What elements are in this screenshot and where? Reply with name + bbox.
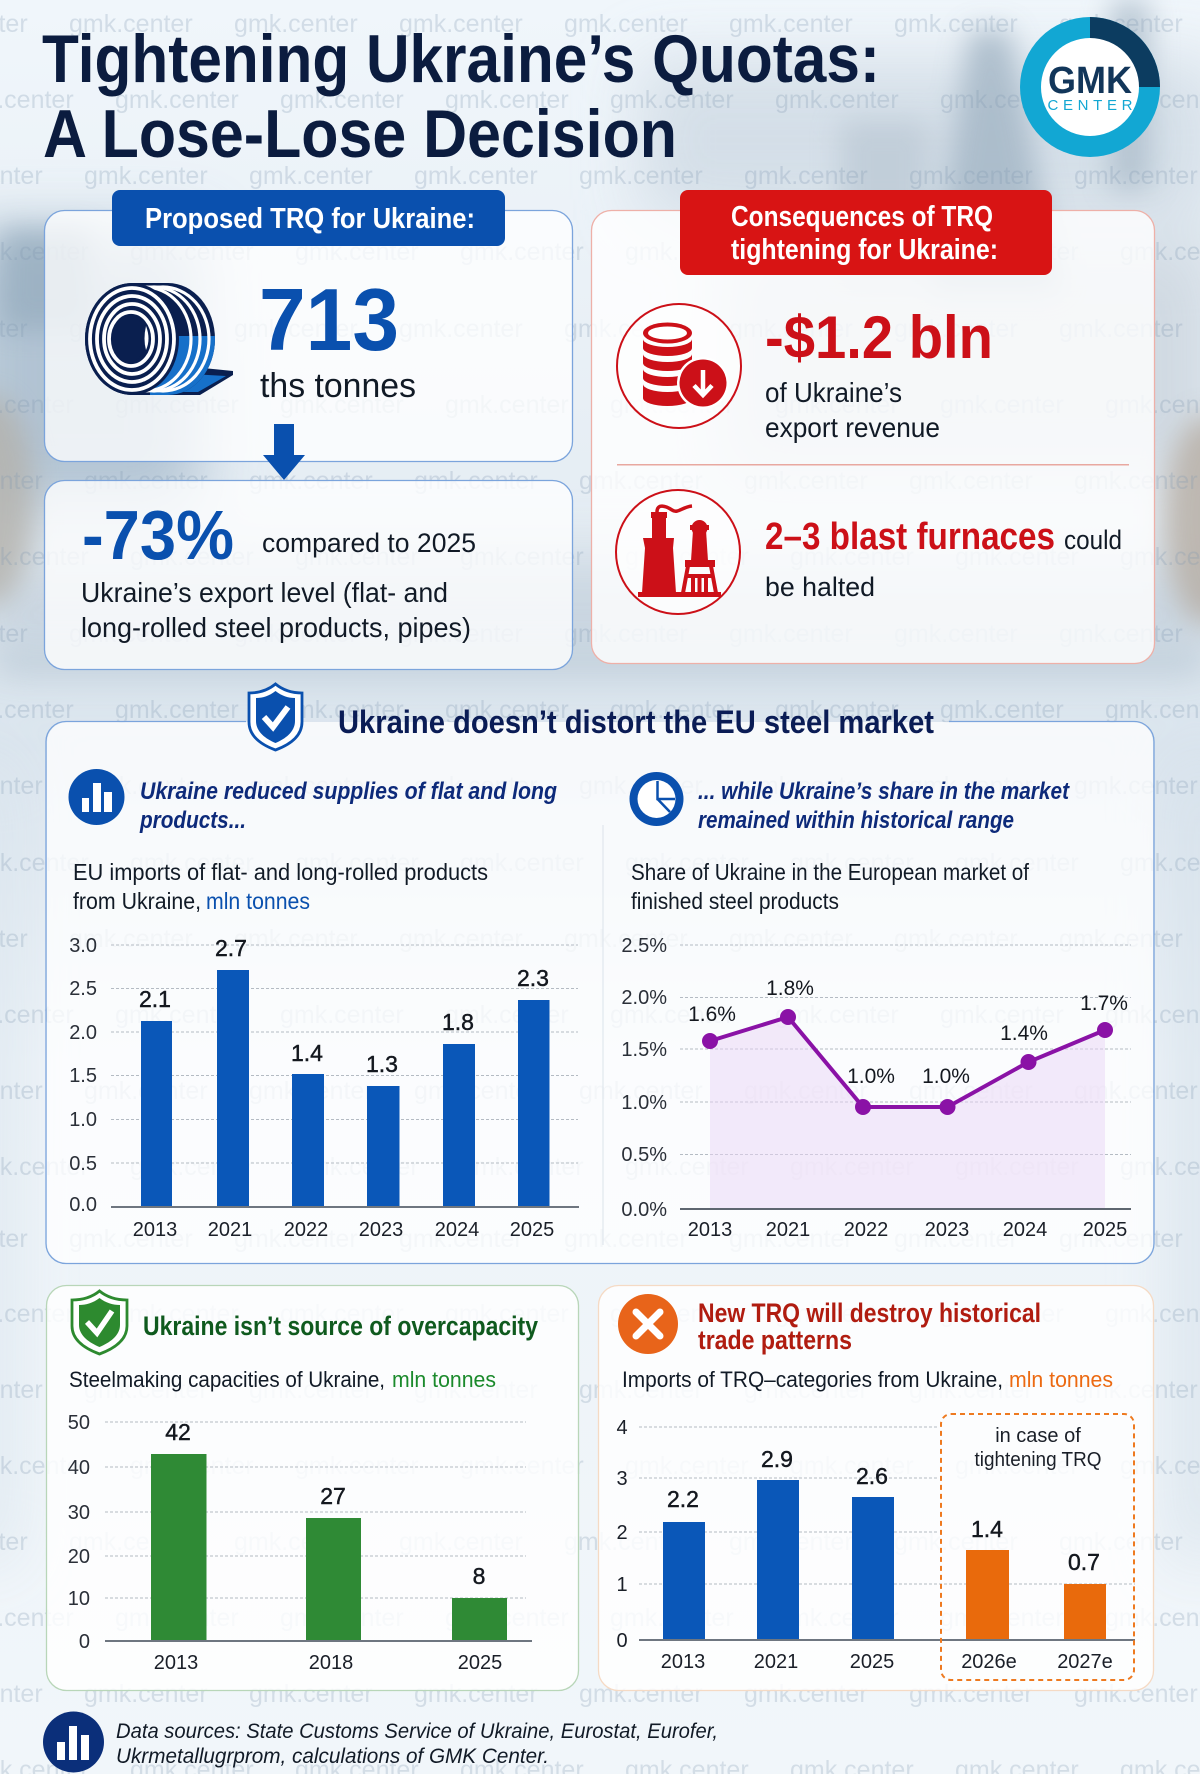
watermark pattern: gmk.center [115, 1300, 239, 1328]
line chart: Ukraine share: 2022 [844, 1219, 888, 1241]
title: Tightening Ukraine’s Quotas: [42, 21, 880, 97]
chart subtitle: TRQ imports: mln tonnes [1009, 1367, 1113, 1392]
chart subtitle: EU imports [73, 859, 488, 914]
line chart: Ukraine share: 1.4% [1000, 1022, 1048, 1045]
bar chart: EU imports: 0.0 [69, 1194, 97, 1216]
bar chart: TRQ imports: 1 [616, 1574, 628, 1596]
watermark pattern: gmk.center [130, 1153, 254, 1181]
watermark pattern: gmk.center [84, 162, 208, 190]
watermark pattern: gmk.center [280, 1300, 404, 1328]
watermark pattern: gmk.center [414, 162, 538, 190]
watermark pattern: gmk.center [280, 391, 404, 419]
watermark pattern: gmk.center [909, 467, 1033, 495]
line chart: Ukraine share: 1.7% [1080, 992, 1128, 1015]
stat: -73%: -73% [82, 496, 234, 574]
watermark pattern: gmk.center [790, 849, 914, 877]
heading: overcapacity: Ukraine isn’t source of overcapacity [143, 1311, 538, 1341]
bar chart: EU imports: 2.7 [215, 935, 247, 961]
bar chart: EU imports: 0.5 [69, 1153, 97, 1175]
subheading: reduced supplies: Ukraine reduced supplies of flat and long [140, 778, 557, 805]
watermark pattern: gmk.center [744, 162, 868, 190]
watermark pattern: gmk.center [579, 1680, 703, 1708]
line chart: Ukraine share: 0.0% [621, 1199, 667, 1221]
watermark pattern: gmk.center [460, 238, 584, 266]
title: A Lose-Lose Decision [43, 96, 677, 172]
logo: GMK Center [1020, 17, 1160, 157]
watermark pattern: gmk.center [249, 1680, 373, 1708]
watermark pattern: gmk.center [414, 467, 538, 495]
watermark pattern: gmk.center [909, 1077, 1033, 1105]
text: export level description [81, 577, 471, 643]
watermark pattern: gmk.center [249, 1376, 373, 1404]
icon: blast furnace [616, 490, 740, 614]
watermark pattern: gmk.center [894, 1528, 1018, 1556]
watermark pattern: gmk.center [399, 10, 523, 38]
bar chart: EU imports: 1.5 [69, 1065, 97, 1087]
bar chart: TRQ imports: 2013 [661, 1651, 705, 1673]
bar chart: steelmaking capacities: 20 [68, 1546, 90, 1568]
watermark pattern: gmk.center [280, 1604, 404, 1632]
watermark pattern: gmk.center [130, 238, 254, 266]
watermark pattern: gmk.center [564, 10, 688, 38]
callout: in case of tightening TRQ: in case of [995, 1425, 1081, 1447]
watermark pattern: gmk.center [295, 1452, 419, 1480]
watermark pattern: gmk.center [909, 1376, 1033, 1404]
heading: trade patterns: New TRQ will destroy historical [698, 1298, 1041, 1328]
bar chart: EU imports: 2013 [133, 1219, 177, 1241]
watermark pattern: gmk.center [445, 1300, 569, 1328]
line chart: Ukraine share: 2.5% [621, 935, 667, 957]
watermark pattern: gmk.center [295, 849, 419, 877]
watermark pattern: gmk.center [399, 925, 523, 953]
logo: GMK Center: CENTER [1048, 97, 1133, 114]
callout: in case of tightening TRQ [941, 1414, 1134, 1680]
panel: consequences [592, 210, 1154, 664]
line chart: Ukraine share: 2021 [766, 1219, 810, 1241]
watermark pattern: gmk.center [69, 620, 193, 648]
bar chart: TRQ imports: 3 [616, 1468, 628, 1490]
title [42, 21, 880, 172]
text: export level description: Ukraine’s export level (flat- and [81, 577, 448, 608]
panel border: EU steel market [46, 722, 1154, 1264]
icon: shield blue [249, 684, 302, 750]
watermark pattern: gmk.center [564, 620, 688, 648]
line chart: Ukraine share: 1.8% [766, 977, 814, 1000]
watermark pattern: gmk.center [775, 86, 899, 114]
bar chart: EU imports: 2023 [359, 1219, 403, 1241]
icon: steel coil [85, 283, 233, 398]
stat: -$1.2 bln: -$1.2 bln [765, 304, 993, 371]
watermark pattern: gmk.center [69, 315, 193, 343]
watermark pattern: gmk.center [234, 925, 358, 953]
watermark pattern: gmk.center [790, 1452, 914, 1480]
bar chart: TRQ imports: 4 [616, 1417, 628, 1439]
watermark pattern: gmk.center [249, 1077, 373, 1105]
header: proposed TRQ: Proposed TRQ for Ukraine: [145, 203, 475, 235]
bar chart: EU imports: 1.0 [69, 1109, 97, 1131]
bar chart: EU imports [69, 935, 579, 1241]
text: data sources: Ukrmetallugrprom, calculations of GMK Center. [116, 1745, 549, 1768]
bar chart: EU imports: 1.4 [291, 1040, 323, 1066]
line chart: Ukraine share: 1.0% [621, 1092, 667, 1114]
watermark pattern: gmk.center [445, 391, 569, 419]
watermark pattern: gmk.center [775, 696, 899, 724]
watermark pattern: gmk.center [280, 696, 404, 724]
watermark pattern: gmk.center [1074, 1376, 1198, 1404]
line chart: Ukraine share: 1.0% [922, 1065, 970, 1088]
watermark pattern: gmk.center [414, 1680, 538, 1708]
panel: export level comparison [44, 480, 572, 670]
bar chart: TRQ imports: 2026e [961, 1651, 1017, 1673]
watermark pattern: gmk.center [790, 543, 914, 571]
watermark pattern: gmk.center [414, 1376, 538, 1404]
watermark pattern: gmk.center [955, 543, 1079, 571]
watermark pattern: gmk.center [460, 543, 584, 571]
watermark pattern: gmk.center [625, 238, 749, 266]
watermark pattern: gmk.center [460, 1153, 584, 1181]
line chart: Ukraine share: 0.5% [621, 1144, 667, 1166]
watermark pattern: gmk.center [295, 238, 419, 266]
watermark pattern: gmk.center [790, 1153, 914, 1181]
bar chart: TRQ imports [616, 1417, 1135, 1673]
watermark pattern: gmk.center [955, 1452, 1079, 1480]
watermark pattern: gmk.center [414, 772, 538, 800]
watermark pattern: gmk.center [130, 849, 254, 877]
subheading: share within range: ... while Ukraine’s share in the market [698, 778, 1070, 805]
bar chart: TRQ imports: 2.9 [761, 1446, 793, 1472]
bar chart: EU imports: 1.8 [442, 1009, 474, 1035]
watermark pattern: gmk.center [399, 1528, 523, 1556]
bar chart: EU imports: 1.3 [366, 1051, 398, 1077]
watermark pattern: gmk.center [234, 1225, 358, 1253]
watermark pattern: gmk.center [610, 1604, 734, 1632]
watermark pattern: gmk.center [115, 391, 239, 419]
icon: data sources [43, 1712, 104, 1772]
text: data sources [116, 1720, 718, 1768]
panel fill: EU steel market [47, 722, 1153, 1263]
bar chart: TRQ imports: 2025 [850, 1651, 894, 1673]
watermark pattern: gmk.center [445, 1001, 569, 1029]
watermark pattern: gmk.center [69, 1225, 193, 1253]
watermark pattern: gmk.center [1074, 162, 1198, 190]
bar chart: TRQ imports: 2.6 [856, 1463, 888, 1489]
watermark pattern: gmk.center [579, 1077, 703, 1105]
header: consequences [680, 190, 1052, 275]
watermark pattern: gmk.center [579, 1376, 703, 1404]
line chart: Ukraine share: 2013 [688, 1219, 732, 1241]
watermark pattern: gmk.center [564, 925, 688, 953]
text: blast furnaces: 2–3 blast furnaces [765, 516, 1055, 558]
chart subtitle: EU imports: EU imports of flat- and long-rolled products [73, 859, 488, 885]
stat: 713: 713 [259, 270, 399, 369]
watermark pattern: gmk.center [579, 772, 703, 800]
watermark pattern: gmk.center [69, 1528, 193, 1556]
watermark pattern: gmk.center [295, 543, 419, 571]
watermark pattern: gmk.center [625, 543, 749, 571]
watermark pattern: gmk.center [69, 10, 193, 38]
header: consequences: Consequences of TRQ [731, 201, 993, 233]
subheading: reduced supplies: products... [139, 807, 246, 834]
icon: coins with down arrow [617, 304, 741, 428]
header: consequences: tightening for Ukraine: [731, 234, 998, 266]
heading: trade patterns: trade patterns [698, 1325, 852, 1355]
chart subtitle: EU imports: mln tonnes [206, 888, 310, 914]
watermark pattern: gmk.center [399, 315, 523, 343]
bar chart: EU imports: 2022 [284, 1219, 328, 1241]
watermark pattern: gmk.center [295, 1153, 419, 1181]
line chart: Ukraine share: 2023 [925, 1219, 969, 1241]
chart subtitle: share: finished steel products [631, 888, 839, 914]
watermark pattern: gmk.center [729, 1528, 853, 1556]
watermark pattern: gmk.center [130, 543, 254, 571]
watermark pattern: gmk.center [775, 1001, 899, 1029]
bar chart: EU imports: 3.0 [69, 935, 97, 957]
watermark pattern: gmk.center [894, 315, 1018, 343]
watermark pattern: gmk.center [940, 1300, 1064, 1328]
bar chart: EU imports: 2.1 [139, 986, 171, 1012]
watermark pattern: gmk.center [1074, 467, 1198, 495]
watermark pattern: gmk.center [894, 620, 1018, 648]
watermark pattern: gmk.center [940, 1001, 1064, 1029]
watermark pattern: gmk.center [909, 1680, 1033, 1708]
watermark pattern: gmk.center [744, 467, 868, 495]
watermark pattern: gmk.center [445, 696, 569, 724]
watermark pattern: gmk.center [1059, 10, 1183, 38]
line chart: Ukraine share: 2.0% [621, 987, 667, 1009]
watermark pattern: gmk.center [115, 1001, 239, 1029]
bar chart: steelmaking capacities: 40 [68, 1457, 90, 1479]
watermark pattern: gmk.center [610, 696, 734, 724]
bar chart: steelmaking capacities: 42 [165, 1419, 191, 1445]
watermark pattern: gmk.center [940, 86, 1064, 114]
watermark pattern: gmk.center [729, 10, 853, 38]
text: export revenue [765, 377, 940, 443]
watermark pattern: gmk.center [1074, 1680, 1198, 1708]
heading: trade patterns [698, 1298, 1041, 1355]
chart subtitle: EU imports: from Ukraine, [73, 888, 201, 914]
watermark pattern: gmk.center [909, 772, 1033, 800]
watermark pattern: gmk.center [460, 1452, 584, 1480]
line chart: Ukraine share: 1.6% [688, 1003, 736, 1026]
watermark pattern: gmk.center [249, 162, 373, 190]
watermark pattern: gmk.center [775, 1604, 899, 1632]
watermark pattern: gmk.center [940, 391, 1064, 419]
watermark pattern: gmk.center [744, 772, 868, 800]
text: export revenue: of Ukraine’s [765, 377, 902, 408]
watermark pattern: gmk.center [894, 1225, 1018, 1253]
chart subtitle: TRQ imports: Imports of TRQ–categories from Ukraine, [622, 1367, 1003, 1392]
watermark pattern: gmk.center [729, 925, 853, 953]
watermark pattern: gmk.center [610, 1001, 734, 1029]
logo: GMK Center: GMK [1048, 60, 1133, 102]
bar chart: EU imports: 2.3 [517, 965, 549, 991]
bar chart: steelmaking capacities: 2013 [154, 1652, 198, 1674]
icon: pie chart circle [630, 772, 684, 826]
watermark pattern: gmk.center [115, 86, 239, 114]
watermark pattern: gmk.center [744, 1077, 868, 1105]
watermark pattern: gmk.center [579, 467, 703, 495]
watermark pattern: gmk.center [234, 620, 358, 648]
panel: proposed TRQ [44, 210, 572, 462]
arrow: down [263, 424, 305, 480]
watermark pattern: gmk.center [130, 1452, 254, 1480]
bar chart: TRQ imports: 2.2 [667, 1486, 699, 1512]
watermark pattern: gmk.center [1074, 1077, 1198, 1105]
subheading: reduced supplies [139, 778, 557, 834]
subheading: share within range: remained within historical range [698, 807, 1014, 834]
watermark pattern: gmk.center [115, 1604, 239, 1632]
watermark pattern: gmk.center [460, 849, 584, 877]
watermark pattern: gmk.center [610, 86, 734, 114]
bar chart: TRQ imports: 2021 [754, 1651, 798, 1673]
bar chart: steelmaking capacities: 2025 [458, 1652, 502, 1674]
chart subtitle: share: Share of Ukraine in the European market of [631, 859, 1030, 885]
watermark pattern: gmk.center [909, 162, 1033, 190]
watermark pattern: gmk.center [84, 772, 208, 800]
watermark pattern: gmk.center [579, 162, 703, 190]
icon: green shield [72, 1291, 127, 1354]
bar chart: TRQ imports: 0 [616, 1630, 628, 1652]
watermark pattern: gmk.center [775, 1300, 899, 1328]
callout: in case of tightening TRQ: tightening TRQ [974, 1449, 1102, 1471]
watermark pattern: gmk.center [249, 772, 373, 800]
watermark pattern: gmk.center [775, 391, 899, 419]
bar chart: EU imports: 2.5 [69, 978, 97, 1000]
bar chart: TRQ imports: 2027e [1057, 1651, 1113, 1673]
watermark pattern: gmk.center [894, 10, 1018, 38]
watermark pattern: gmk.center [399, 1225, 523, 1253]
text: blast furnaces [765, 516, 1122, 602]
text: data sources: Data sources: State Customs Service of Ukraine, Eurostat, Eurofer, [116, 1720, 718, 1743]
bar chart: TRQ imports: 1.4 [971, 1516, 1003, 1542]
watermark pattern: gmk.center [280, 1001, 404, 1029]
bar chart: steelmaking capacities: 8 [473, 1563, 485, 1589]
panel: overcapacity [46, 1286, 578, 1690]
watermark pattern: gmk.center [729, 315, 853, 343]
watermark pattern: gmk.center [955, 849, 1079, 877]
watermark pattern: gmk.center [84, 1680, 208, 1708]
watermark pattern: gmk.center [940, 696, 1064, 724]
watermark pattern: gmk.center [1059, 620, 1183, 648]
bar chart: steelmaking capacities: 2018 [309, 1652, 353, 1674]
text: ths tonnes: ths tonnes [260, 367, 416, 405]
bar chart: steelmaking capacities: 0 [79, 1631, 90, 1653]
watermark pattern: gmk.center [955, 1153, 1079, 1181]
text: export level description: long-rolled steel products, pipes) [81, 612, 471, 643]
panel: trade patterns [598, 1286, 1154, 1690]
watermark pattern: gmk.center [744, 1376, 868, 1404]
line chart: Ukraine share: 2025 [1083, 1219, 1127, 1241]
watermark pattern: gmk.center [1059, 925, 1183, 953]
watermark pattern: gmk.center [1059, 315, 1183, 343]
bar chart: steelmaking capacities [68, 1412, 532, 1674]
bar chart: EU imports: 2021 [208, 1219, 252, 1241]
watermark pattern: gmk.center [610, 391, 734, 419]
header: proposed TRQ [112, 190, 505, 246]
bar chart: TRQ imports: 2 [616, 1522, 628, 1544]
text: export revenue: export revenue [765, 412, 940, 443]
watermark pattern: gmk.center [564, 1225, 688, 1253]
watermark pattern: gmk.center [894, 925, 1018, 953]
watermark pattern: gmk.center [729, 620, 853, 648]
watermark pattern: gmk.center [84, 467, 208, 495]
bar chart: steelmaking capacities: 27 [320, 1483, 346, 1509]
watermark pattern: gmk.center [234, 1528, 358, 1556]
watermark pattern: gmk.center [84, 1077, 208, 1105]
watermark pattern: gmk.center [69, 925, 193, 953]
bar chart: steelmaking capacities: 10 [68, 1588, 90, 1610]
icon: orange cross [618, 1294, 678, 1354]
chart subtitle: capacities: mln tonnes [392, 1367, 496, 1392]
watermark pattern: gmk.center [1074, 772, 1198, 800]
text: blast furnaces: be halted [765, 572, 875, 602]
line chart: Ukraine share: 1.5% [621, 1039, 667, 1061]
text: compared to 2025: compared to 2025 [262, 528, 476, 558]
bar chart: EU imports: 2.0 [69, 1022, 97, 1044]
watermark pattern: gmk.center [1059, 1225, 1183, 1253]
watermark pattern: gmk.center [445, 1604, 569, 1632]
watermark pattern: gmk.center [1059, 1528, 1183, 1556]
icon: bar chart circle [68, 769, 124, 825]
watermark pattern: gmk.center [234, 10, 358, 38]
watermark pattern: gmk.center [84, 1376, 208, 1404]
watermark pattern: gmk.center [790, 238, 914, 266]
bar chart: TRQ imports: 0.7 [1068, 1549, 1100, 1575]
chart subtitle: share [631, 859, 1030, 914]
watermark pattern: gmk.center [399, 620, 523, 648]
watermark pattern: gmk.center [610, 1300, 734, 1328]
watermark pattern: gmk.center [940, 1604, 1064, 1632]
watermark pattern: gmk.center [625, 1153, 749, 1181]
text: blast furnaces: could [1064, 525, 1122, 555]
bar chart: steelmaking capacities: 50 [68, 1412, 90, 1434]
watermark pattern: gmk.center [249, 467, 373, 495]
watermark pattern: gmk.center [445, 86, 569, 114]
bar chart: steelmaking capacities: 30 [68, 1502, 90, 1524]
watermark pattern: gmk.center [414, 1077, 538, 1105]
watermark pattern: gmk.center [234, 315, 358, 343]
watermark pattern: gmk.center [625, 1452, 749, 1480]
heading: EU steel market: Ukraine doesn’t distort the EU steel market [338, 704, 934, 740]
watermark pattern: gmk.center [280, 86, 404, 114]
watermark pattern: gmk.center [564, 1528, 688, 1556]
watermark pattern: gmk.center [625, 849, 749, 877]
chart subtitle: capacities: Steelmaking capacities of Ukraine, [69, 1367, 385, 1392]
line chart: Ukraine share: 1.0% [847, 1065, 895, 1088]
line chart: Ukraine share [621, 935, 1131, 1241]
watermark pattern: gmk.center [955, 238, 1079, 266]
watermark pattern: gmk.center [115, 696, 239, 724]
watermark pattern: gmk.center [744, 1680, 868, 1708]
bar chart: EU imports: 2024 [435, 1219, 479, 1241]
line chart: Ukraine share: 2024 [1003, 1219, 1047, 1241]
watermark pattern: gmk.center [729, 1225, 853, 1253]
watermark pattern: gmk.center [564, 315, 688, 343]
bar chart: EU imports: 2025 [510, 1219, 554, 1241]
subheading: share within range [698, 778, 1070, 834]
